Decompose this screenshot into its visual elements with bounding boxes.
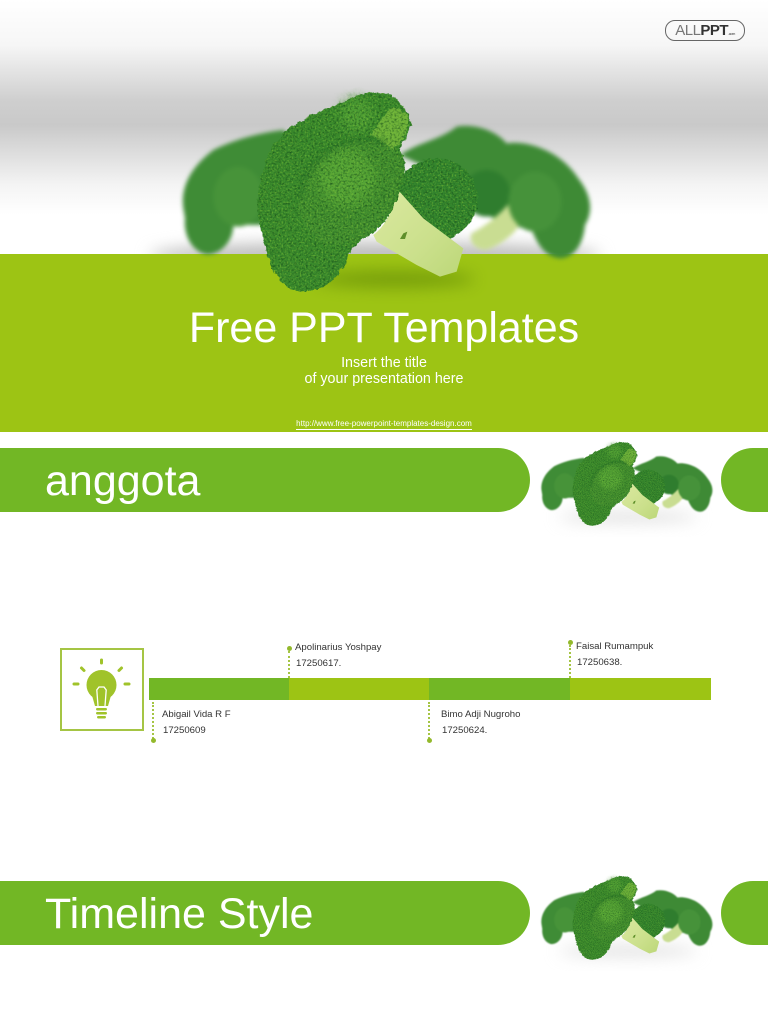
- marker: Bimo: [427, 702, 432, 743]
- marker: Abigail: [151, 702, 156, 743]
- heading bar: Timeline Style: [0, 881, 530, 945]
- marker: Faisal: [568, 640, 573, 678]
- hero background: [0, 0, 768, 254]
- marker: Apolinarius: [287, 646, 292, 678]
- green title panel: [0, 254, 768, 432]
- right pill: anggota: [721, 448, 768, 512]
- broccoli: timeline header image: [541, 876, 712, 960]
- shadow: timeline image: [558, 947, 698, 955]
- logo: ALLPPT: ALLPPT.com: [675, 22, 735, 39]
- website link: http://www.free-powerpoint-templates-design.com: [296, 419, 472, 428]
- icon: light bulb: [60, 648, 144, 731]
- label: Bimo: 17250624.: [442, 725, 487, 736]
- timeline: [60, 640, 711, 743]
- heading bar: anggota: [0, 448, 530, 512]
- shadow on green: hero: [315, 271, 475, 287]
- shadow: anggota image: [558, 513, 698, 521]
- label: Faisal: Faisal Rumampuk: [576, 641, 653, 652]
- label: Abigail: 17250609: [163, 725, 206, 736]
- ground shadow: hero: [150, 234, 600, 254]
- broccoli: hero image: [183, 92, 590, 291]
- subtitle: Insert the title: [341, 355, 427, 371]
- label: Abigail: Abigail Vida R F: [162, 709, 231, 720]
- label: Bimo: [441, 709, 520, 736]
- title: Free PPT Templates: [189, 304, 579, 352]
- label: Faisal: [576, 641, 654, 668]
- subtitle: [305, 355, 463, 387]
- subtitle: of your presentation here: [305, 371, 463, 387]
- broccoli: anggota header image: [541, 442, 712, 526]
- label: Apolinarius: Apolinarius Yoshpay: [295, 642, 381, 653]
- heading bar: Timeline Style: Timeline Style: [45, 890, 313, 938]
- logo: ALLPPT: [665, 20, 745, 41]
- timeline bar: [149, 678, 711, 700]
- label: Apolinarius: 17250617.: [296, 658, 341, 669]
- label: Abigail: [162, 709, 231, 736]
- label: Apolinarius: [295, 642, 382, 669]
- broccoli illustrations: [150, 88, 714, 961]
- heading bar: anggota: anggota: [45, 457, 200, 505]
- label: Faisal: 17250638.: [577, 657, 622, 668]
- label: Bimo: Bimo Adji Nugroho: [441, 709, 520, 720]
- right pill: Timeline Style: [721, 881, 768, 945]
